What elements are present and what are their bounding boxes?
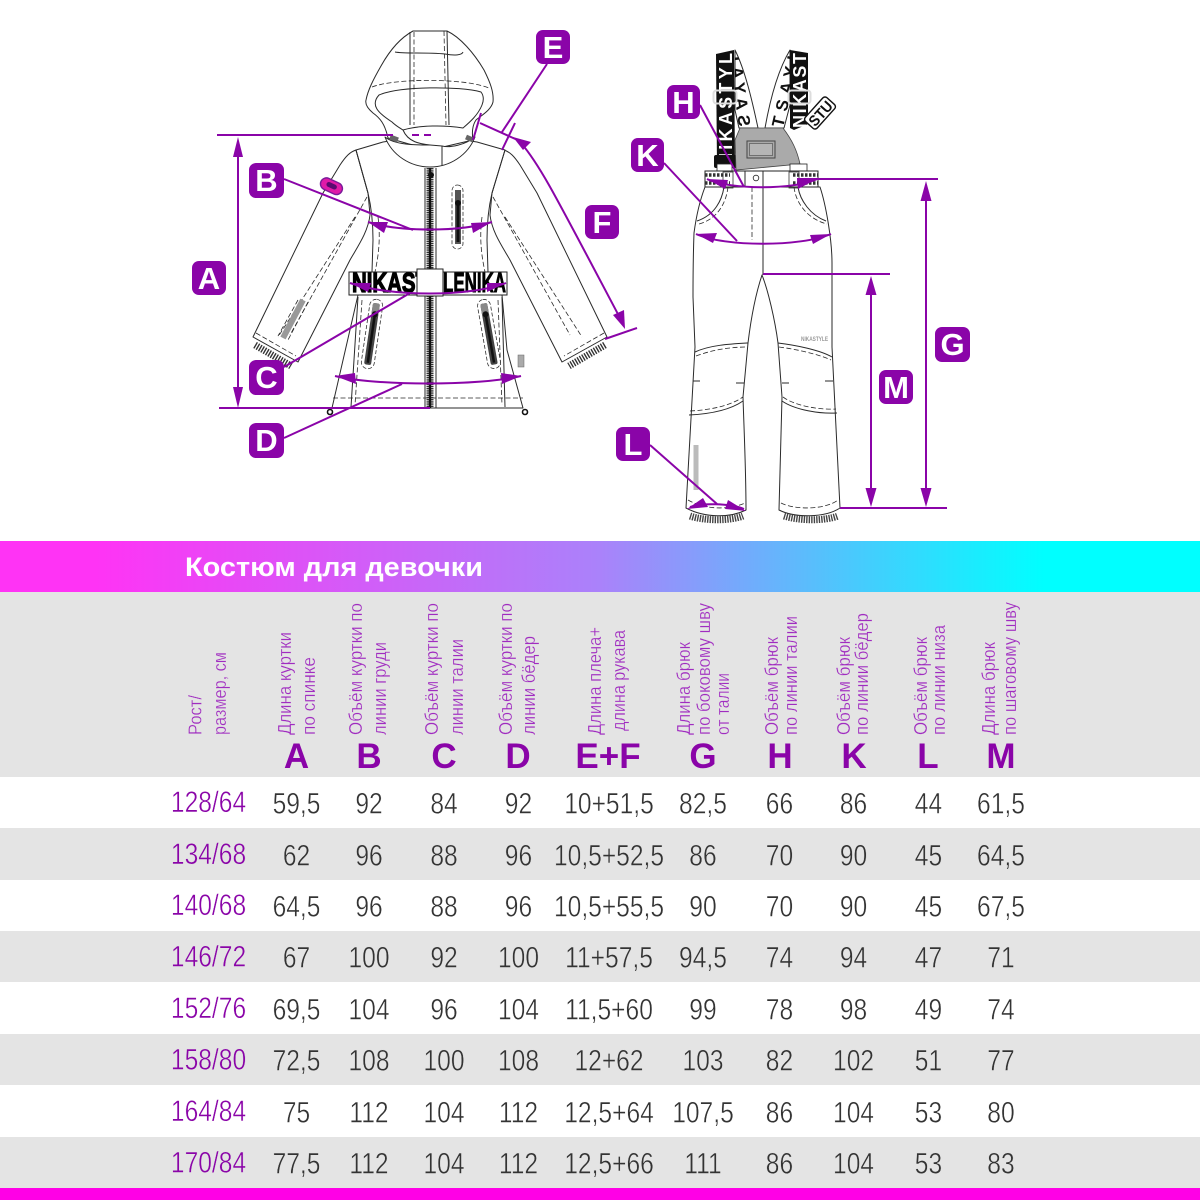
badge M: M bbox=[883, 370, 909, 405]
badge H bbox=[667, 85, 700, 120]
badge A bbox=[192, 261, 226, 296]
row 164/84: 112 bbox=[349, 1095, 389, 1129]
row 158/80: 51 bbox=[915, 1043, 942, 1077]
chest pocket bbox=[452, 185, 463, 249]
row 164/84: 164/84 bbox=[171, 1094, 246, 1128]
column heading: A: Длина куртки bbox=[275, 632, 295, 735]
row 134/68: 64,5 bbox=[977, 838, 1025, 872]
jacket measurement D: hips bbox=[284, 373, 521, 438]
column heading: E+F bbox=[575, 627, 641, 776]
goggles patch bbox=[318, 176, 344, 197]
jacket collar bbox=[385, 130, 475, 167]
row 164/84: 104 bbox=[424, 1095, 465, 1129]
bottom magenta bar bbox=[0, 1188, 1200, 1200]
row 152/76: 11,5+60 bbox=[565, 992, 653, 1026]
jacket hood bbox=[366, 31, 493, 150]
row 164/84: 107,5 bbox=[672, 1095, 734, 1129]
trousers measurement K: hips bbox=[664, 163, 831, 244]
column heading: G: от талии bbox=[713, 673, 733, 735]
jacket measurement E: shoulder bbox=[473, 64, 547, 150]
row 146/72: 11+57,5 bbox=[565, 940, 653, 974]
badge C bbox=[249, 360, 284, 395]
row 152/76: 104 bbox=[498, 992, 539, 1026]
row 152/76 bbox=[171, 991, 1015, 1026]
column heading: D: D bbox=[505, 737, 531, 776]
row 158/80 bbox=[171, 1042, 1015, 1077]
trousers measurement G: side seam bbox=[797, 179, 947, 508]
jacket technical drawing bbox=[253, 31, 607, 414]
strap tab: STU bbox=[805, 98, 837, 130]
badge K bbox=[631, 138, 664, 173]
bib panel bbox=[717, 128, 807, 171]
row 152/76: 98 bbox=[840, 992, 867, 1026]
row 128/64: 86 bbox=[840, 786, 867, 820]
column heading: K bbox=[834, 613, 872, 776]
row 134/68: 70 bbox=[766, 838, 793, 872]
column heading: L: L bbox=[917, 737, 939, 776]
jacket left sleeve bbox=[253, 150, 370, 366]
trousers measurement M: inseam bbox=[763, 274, 890, 507]
column heading: size: Рост/ bbox=[186, 695, 206, 735]
row 134/68: 62 bbox=[283, 838, 310, 872]
row 128/64: 92 bbox=[505, 786, 532, 820]
column heading: B: линии груди bbox=[370, 642, 390, 735]
hem toggles and label bbox=[328, 355, 528, 414]
row 170/84 bbox=[171, 1145, 1015, 1180]
column heading: C bbox=[422, 603, 467, 776]
row 140/68: 70 bbox=[766, 889, 793, 923]
trousers measurement L: bottom bbox=[650, 445, 746, 511]
column heading: G: Длина брюк bbox=[674, 642, 694, 735]
row 158/80: 103 bbox=[682, 1043, 724, 1077]
row 128/64: 128/64 bbox=[171, 785, 246, 819]
row 134/68: 90 bbox=[840, 838, 867, 872]
badge D: D bbox=[255, 423, 278, 458]
column heading: L bbox=[911, 624, 949, 776]
badge L: L bbox=[624, 427, 642, 462]
row 152/76: 78 bbox=[766, 992, 793, 1026]
row 140/68: 96 bbox=[355, 889, 383, 923]
row 140/68: 64,5 bbox=[273, 889, 320, 923]
row 140/68: 140/68 bbox=[171, 888, 246, 922]
row 152/76: 99 bbox=[689, 992, 717, 1026]
badge K: K bbox=[636, 138, 659, 173]
row 128/64: 82,5 bbox=[679, 786, 727, 820]
column heading: L: Объём брюк bbox=[911, 637, 931, 735]
row 158/80: 102 bbox=[833, 1043, 874, 1077]
row 146/72: 100 bbox=[348, 940, 390, 974]
row 146/72: 47 bbox=[915, 940, 942, 974]
column heading: M bbox=[979, 602, 1020, 776]
title banner bbox=[0, 541, 1200, 592]
row 140/68: 96 bbox=[505, 889, 532, 923]
jacket right sleeve bbox=[490, 150, 607, 366]
badge E: E bbox=[543, 30, 563, 65]
column heading: K: K bbox=[841, 737, 867, 776]
column heading: size: размер, см bbox=[210, 652, 230, 735]
column heading: G: по боковому шву bbox=[694, 603, 714, 735]
row 140/68 bbox=[171, 888, 1025, 923]
column heading: C: Объём куртки по bbox=[422, 603, 442, 735]
badge B: B bbox=[255, 163, 278, 198]
row 170/84: 12,5+66 bbox=[564, 1146, 654, 1180]
table header bbox=[0, 592, 1200, 777]
jacket measurement A: length bbox=[217, 135, 433, 408]
belt with logo: NIKAST bbox=[352, 267, 428, 298]
row 164/84 bbox=[171, 1094, 1015, 1129]
row 170/84: 112 bbox=[499, 1146, 538, 1180]
row 170/84: 77,5 bbox=[273, 1146, 320, 1180]
jacket measurement F: sleeve bbox=[513, 137, 637, 339]
column heading: E+F: длина рукава bbox=[609, 629, 629, 731]
row 152/76: 74 bbox=[987, 992, 1015, 1026]
column heading: H: Объём брюк bbox=[762, 637, 782, 735]
jacket main zipper bbox=[425, 168, 436, 408]
row 152/76: 152/76 bbox=[171, 991, 246, 1025]
row 152/76: 104 bbox=[348, 992, 390, 1026]
waistband bbox=[705, 171, 818, 188]
row 134/68 bbox=[171, 837, 1025, 872]
column heading: G bbox=[674, 603, 733, 776]
trousers measurement H: waist bbox=[700, 105, 817, 189]
row 140/68: 88 bbox=[430, 889, 458, 923]
left white suspender strap bbox=[734, 50, 758, 128]
column heading: C: линии талии bbox=[447, 639, 467, 735]
row 134/68: 96 bbox=[505, 838, 532, 872]
row 170/84: 111 bbox=[684, 1146, 722, 1180]
column heading: E+F: E+F bbox=[575, 737, 641, 776]
row 170/84: 170/84 bbox=[171, 1145, 246, 1179]
column heading: M: M bbox=[986, 737, 1016, 776]
row 170/84: 104 bbox=[833, 1146, 874, 1180]
belt with logo bbox=[349, 267, 507, 298]
row 128/64: 66 bbox=[766, 786, 793, 820]
column heading: size bbox=[186, 652, 230, 735]
column heading: D: линии бёдер bbox=[519, 636, 539, 735]
badge D bbox=[249, 423, 284, 458]
row 164/84: 12,5+64 bbox=[564, 1095, 654, 1129]
row 170/84: 86 bbox=[766, 1146, 793, 1180]
left white suspender strap: SAYAL bbox=[724, 50, 754, 128]
row 134/68: 45 bbox=[915, 838, 942, 872]
row 140/68: 90 bbox=[840, 889, 867, 923]
row 164/84: 75 bbox=[283, 1095, 310, 1129]
row 134/68: 134/68 bbox=[171, 837, 246, 871]
right white suspender strap bbox=[764, 50, 790, 128]
row 152/76: 69,5 bbox=[273, 992, 320, 1026]
badge F bbox=[585, 205, 619, 240]
row 158/80: 108 bbox=[498, 1043, 539, 1077]
title banner: Костюм для девочки bbox=[185, 552, 483, 582]
row 170/84: 104 bbox=[424, 1146, 465, 1180]
row 134/68: 88 bbox=[430, 838, 458, 872]
row 140/68: 10,5+55,5 bbox=[554, 889, 664, 923]
badge G bbox=[935, 327, 970, 362]
badge H: H bbox=[672, 85, 695, 120]
column heading: L: по линии низа bbox=[929, 624, 949, 735]
badge B bbox=[249, 163, 284, 198]
row 146/72 bbox=[171, 939, 1015, 974]
right black suspender strap: NIKAST bbox=[790, 53, 810, 128]
column heading: M: по шаговому шву bbox=[1000, 602, 1020, 735]
row 128/64 bbox=[171, 785, 1025, 820]
jacket measurement C: waist bbox=[284, 283, 506, 367]
row 128/64: 92 bbox=[355, 786, 383, 820]
row 134/68: 10,5+52,5 bbox=[554, 838, 664, 872]
trousers legs: NIKASTYLE bbox=[801, 337, 828, 343]
trousers legs bbox=[686, 187, 840, 520]
column heading: A: по спинке bbox=[299, 657, 319, 735]
right white suspender strap: TSAYL bbox=[768, 49, 804, 129]
belt with logo: LENIKA bbox=[443, 267, 506, 298]
row 158/80: 100 bbox=[424, 1043, 465, 1077]
row 140/68: 90 bbox=[689, 889, 717, 923]
trousers technical drawing bbox=[686, 49, 840, 520]
row 146/72: 71 bbox=[987, 940, 1015, 974]
row 146/72: 67 bbox=[283, 940, 310, 974]
column heading: G: G bbox=[689, 737, 717, 776]
row 158/80: 82 bbox=[766, 1043, 793, 1077]
column heading: B bbox=[346, 603, 390, 776]
column heading: E+F: Длина плеча+ bbox=[585, 627, 605, 735]
row 152/76: 96 bbox=[430, 992, 458, 1026]
badge C: C bbox=[255, 360, 278, 395]
row 128/64: 10+51,5 bbox=[564, 786, 654, 820]
jacket measurement B: chest bbox=[284, 179, 492, 233]
badge A: A bbox=[198, 261, 220, 296]
row 128/64: 44 bbox=[915, 786, 942, 820]
row 146/72: 74 bbox=[766, 940, 793, 974]
badge G: G bbox=[940, 327, 965, 362]
left black suspender strap: NIKASTYL bbox=[716, 53, 736, 166]
row 146/72: 92 bbox=[430, 940, 458, 974]
row 146/72: 100 bbox=[498, 940, 539, 974]
column heading: H bbox=[762, 616, 801, 776]
badge L bbox=[616, 427, 650, 462]
row 164/84: 80 bbox=[987, 1095, 1015, 1129]
row 140/68: 45 bbox=[915, 889, 942, 923]
column heading: H: H bbox=[767, 737, 793, 776]
strap loops bbox=[714, 90, 810, 168]
row 158/80: 77 bbox=[987, 1043, 1015, 1077]
column heading: D bbox=[496, 603, 539, 776]
row 146/72: 94,5 bbox=[679, 940, 727, 974]
right lower pocket bbox=[477, 298, 501, 370]
row 170/84: 83 bbox=[987, 1146, 1015, 1180]
row 146/72: 146/72 bbox=[171, 939, 246, 973]
row 164/84: 112 bbox=[499, 1095, 538, 1129]
row 152/76: 49 bbox=[915, 992, 942, 1026]
row 134/68: 86 bbox=[689, 838, 717, 872]
row 164/84: 86 bbox=[766, 1095, 793, 1129]
row 158/80: 158/80 bbox=[171, 1042, 246, 1076]
column heading: K: Объём брюк bbox=[834, 637, 854, 735]
column heading: B: Объём куртки по bbox=[346, 603, 366, 735]
column heading: M: Длина брюк bbox=[979, 642, 999, 735]
badge E bbox=[536, 30, 570, 65]
row 146/72: 94 bbox=[840, 940, 867, 974]
column heading: K: по линии бёдер bbox=[852, 613, 872, 735]
column heading: C: C bbox=[431, 737, 457, 776]
row 128/64: 59,5 bbox=[273, 786, 320, 820]
badge F: F bbox=[593, 205, 611, 240]
row 170/84: 53 bbox=[915, 1146, 942, 1180]
row 134/68: 96 bbox=[355, 838, 383, 872]
row 158/80: 12+62 bbox=[574, 1043, 644, 1077]
left lower pocket bbox=[360, 298, 384, 370]
row 140/68: 67,5 bbox=[977, 889, 1025, 923]
column heading: A bbox=[275, 632, 319, 776]
column heading: D: Объём куртки по bbox=[496, 603, 516, 735]
row 128/64: 61,5 bbox=[977, 786, 1025, 820]
row 164/84: 53 bbox=[915, 1095, 942, 1129]
jacket body bbox=[332, 135, 523, 408]
column heading: H: по линии талии bbox=[781, 616, 801, 735]
row 158/80: 72,5 bbox=[273, 1043, 320, 1077]
column heading: B: B bbox=[356, 737, 382, 776]
row 170/84: 112 bbox=[349, 1146, 389, 1180]
table row backgrounds bbox=[0, 828, 1200, 1188]
row 158/80: 108 bbox=[348, 1043, 390, 1077]
row 128/64: 84 bbox=[430, 786, 458, 820]
column heading: A: A bbox=[284, 737, 309, 776]
row 164/84: 104 bbox=[833, 1095, 874, 1129]
